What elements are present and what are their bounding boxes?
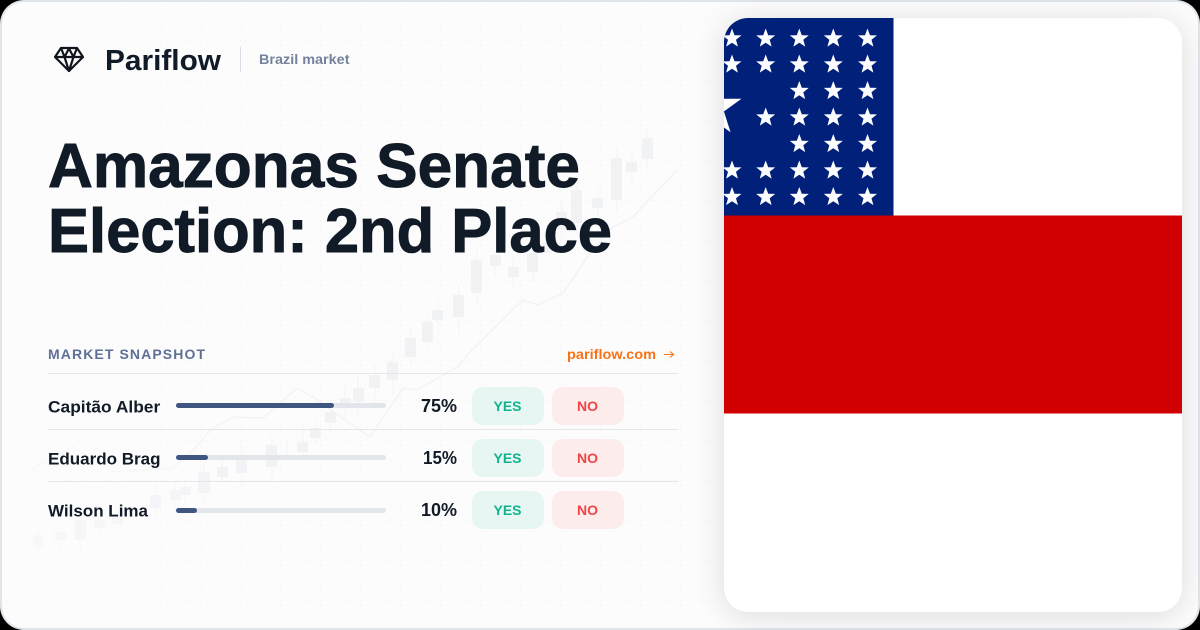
section heading: market snapshot: MARKET SNAPSHOT: [48, 346, 205, 362]
market label: Brazil market: [259, 51, 350, 67]
no button: NO: [577, 398, 598, 414]
logo wordmark: Pariflow: [105, 45, 221, 77]
arrow: [664, 352, 674, 358]
probability bar 15%: [176, 455, 386, 460]
yes button: [472, 491, 544, 529]
no button: [552, 439, 624, 477]
canton stars: [724, 28, 877, 206]
title: Election: 2nd Place: [48, 197, 612, 266]
row: Capitão Alberto Neto: Capitão Alberto Neto: [48, 398, 220, 416]
row: Eduardo Braga: 15%: [423, 448, 457, 468]
title: [48, 132, 612, 266]
link: pariflow.com: pariflow.com: [567, 346, 656, 362]
row: Wilson Lima: Wilson Lima: [48, 502, 149, 520]
row: Wilson Lima: 10%: [421, 500, 457, 520]
row: Eduardo Braga: [48, 439, 624, 477]
icon: diamond logo: [55, 48, 83, 71]
no button: NO: [577, 450, 598, 466]
yes button: YES: [493, 450, 522, 466]
yes button: YES: [493, 398, 522, 414]
row: Capitão Alberto Neto: [48, 387, 624, 425]
flag card shadow: [724, 22, 1182, 616]
no button: [552, 491, 624, 529]
yes button: [472, 439, 544, 477]
no button: NO: [577, 502, 598, 518]
row: Capitão Alberto Neto: 75%: [421, 396, 457, 416]
title: Amazonas Senate: [48, 132, 580, 201]
row: Wilson Lima: [48, 491, 624, 529]
flag of Amazonas: [684, 18, 1182, 612]
probability bar 75%: [176, 403, 386, 408]
background candlestick chart: [188, 130, 677, 495]
flag canton: [724, 18, 894, 216]
yes button: YES: [493, 502, 522, 518]
yes button: [472, 387, 544, 425]
probability bar 10%: [176, 508, 386, 513]
no button: [552, 387, 624, 425]
row: Eduardo Braga: Eduardo Braga: [48, 450, 171, 468]
header divider: [240, 47, 241, 72]
table rules: [48, 373, 678, 482]
